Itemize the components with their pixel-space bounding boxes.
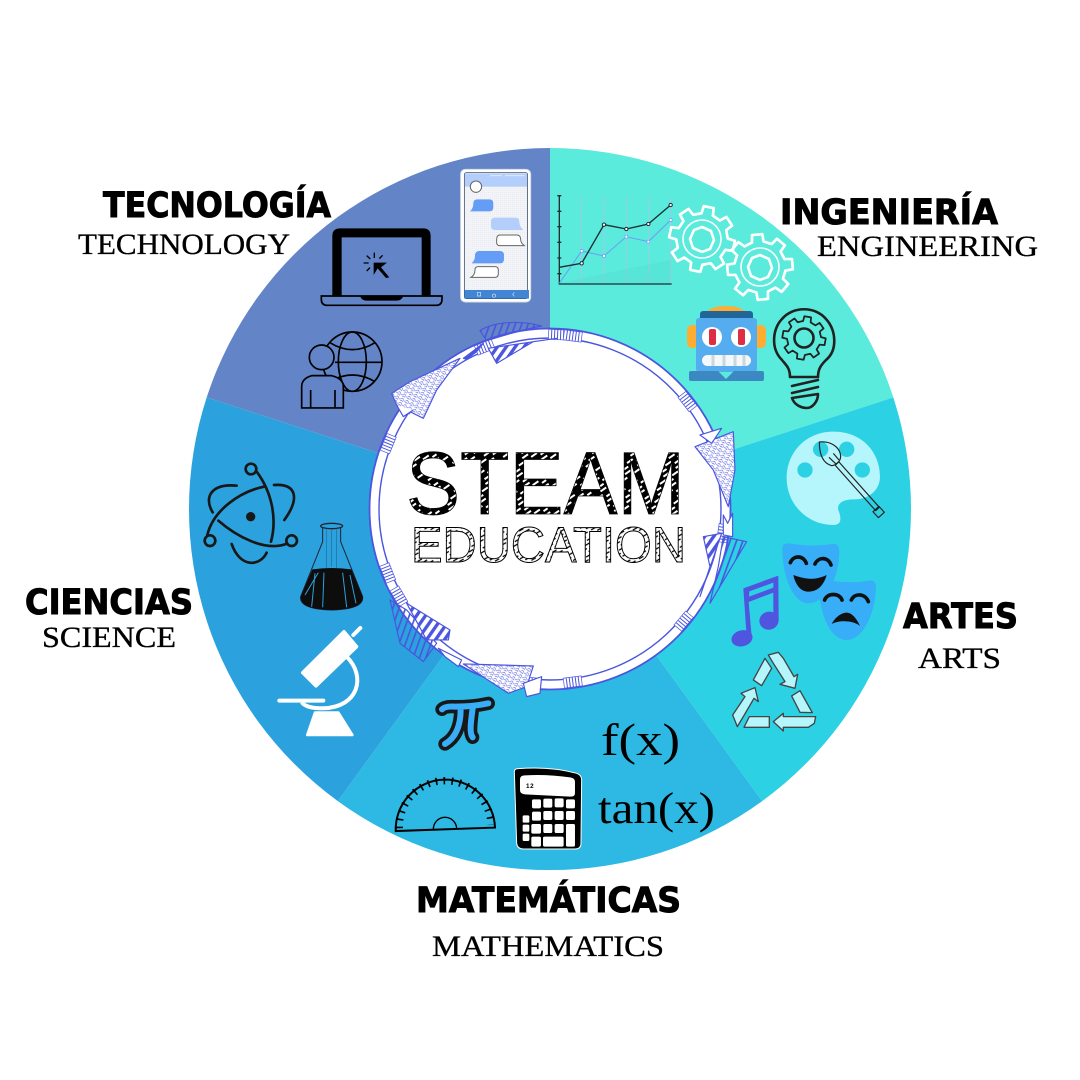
label: Mathematics: MATHEMATICS (432, 930, 664, 963)
icon: music note (730, 576, 781, 649)
icon: flask (301, 523, 363, 610)
icon: protractor (394, 778, 495, 831)
icon: person and globe (302, 332, 382, 408)
title: STEAM: STEAM (406, 433, 685, 533)
arrowheads around ring (390, 322, 747, 697)
heading: Tecnología: TECNOLOGÍA (103, 184, 331, 226)
panel: engineering sector (550, 148, 893, 509)
panel: technology sector (207, 148, 550, 509)
icon: phone with chat (461, 169, 531, 302)
panel: mathematics sector (338, 509, 762, 870)
icon: calculator: 12 (526, 783, 534, 790)
label: Technology: TECHNOLOGY (78, 228, 290, 261)
label: Science: SCIENCE (42, 621, 176, 654)
heading: Matemáticas: MATEMÁTICAS (416, 879, 681, 921)
icon: palette and brush (787, 432, 884, 525)
heading: Ingeniería: INGENIERÍA (780, 191, 998, 233)
icon: line chart (557, 196, 672, 284)
panel: arts sector (550, 397, 911, 801)
icon: microscope (279, 628, 360, 735)
icon: pi symbol (442, 703, 488, 744)
icon: gears (663, 200, 795, 302)
icon: recycle symbol (733, 652, 816, 731)
icon: atom (205, 464, 297, 563)
formula: tan(x): tan(x) (598, 784, 715, 833)
formula: f(x): f(x) (601, 714, 680, 765)
central circle with ring (370, 328, 730, 690)
heading: Artes: ARTES (903, 597, 1018, 637)
panel: science sector (189, 397, 550, 801)
icon: light bulb with gear (774, 309, 834, 408)
subtitle: EDUCATION: EDUCATION (411, 517, 686, 573)
heading: Ciencias: CIENCIAS (25, 583, 193, 623)
icon: calculator (514, 768, 582, 849)
icon: laptop with cursor (321, 228, 442, 305)
label: Engineering: ENGINEERING (817, 230, 1038, 263)
icon: robot (687, 306, 766, 381)
label: Arts: ARTS (918, 642, 1001, 675)
icon: theatre masks (782, 543, 876, 640)
